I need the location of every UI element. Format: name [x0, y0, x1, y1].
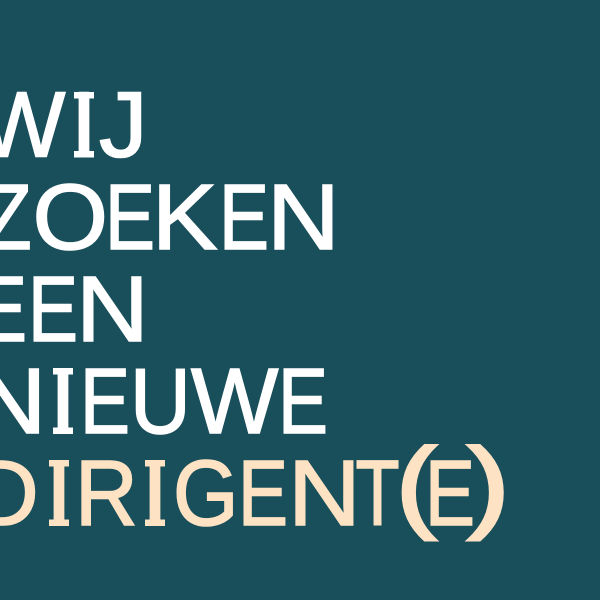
heading line: NIEUWE: W — [191, 349, 278, 453]
heading line: ZOEKEN: E — [105, 165, 155, 269]
highlighted line: DIRIGENT(E): I — [46, 442, 72, 545]
heading line: WIJ: J — [99, 74, 148, 177]
highlighted line: DIRIGENT(E): T — [356, 441, 400, 545]
heading line: ZOEKEN: O — [32, 166, 108, 269]
heading line: EEN — [0, 257, 149, 361]
heading line: ZOEKEN: N — [267, 165, 340, 269]
heading line: WIJ — [0, 72, 148, 177]
heading line: NIEUWE: E — [278, 349, 328, 453]
highlighted line: DIRIGENT(E): G — [173, 441, 238, 545]
heading line: ZOEKEN — [0, 165, 340, 269]
heading line: ZOEKEN: K — [152, 167, 217, 269]
heading line: NIEUWE: U — [130, 349, 191, 453]
highlighted line: DIRIGENT(E): N — [288, 441, 361, 545]
highlighted line: DIRIGENT(E): I — [142, 442, 168, 545]
heading line: WIJ: I — [70, 74, 97, 177]
heading line: NIEUWE: I — [50, 350, 76, 453]
heading line: EEN: N — [76, 257, 149, 361]
highlighted line: DIRIGENT(E) — [0, 428, 510, 546]
heading line: ZOEKEN: E — [219, 165, 269, 269]
heading line: EEN: E — [28, 257, 78, 361]
highlighted line: DIRIGENT(E): ( — [396, 428, 436, 541]
highlighted line: DIRIGENT(E): R — [75, 443, 138, 546]
heading line: NIEUWE — [0, 349, 328, 453]
highlighted line: DIRIGENT(E): E — [425, 441, 475, 545]
highlighted line: DIRIGENT(E): ) — [468, 428, 510, 541]
highlighted line: DIRIGENT(E): E — [238, 441, 288, 545]
heading line: NIEUWE: E — [80, 349, 130, 453]
